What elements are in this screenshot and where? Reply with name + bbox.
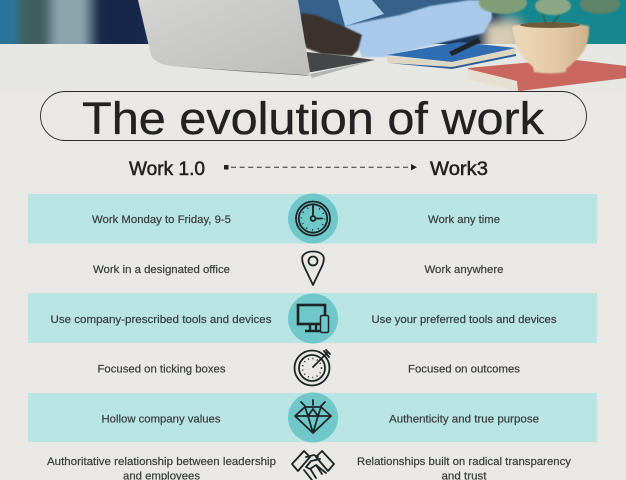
right text: Focused on outcomes xyxy=(408,364,521,376)
heading: Work 1.0: Work 1.0 xyxy=(129,159,205,180)
shirt sleeve xyxy=(344,0,492,57)
icon: handshake xyxy=(292,451,334,480)
right text: Work anywhere xyxy=(424,264,504,276)
icon: monitor and phone xyxy=(288,294,338,344)
left text: Focused on ticking boxes xyxy=(98,364,226,376)
title pill xyxy=(40,92,586,144)
icon: map pin xyxy=(302,252,324,285)
row 1: schedule xyxy=(28,194,597,244)
left text: Work Monday to Friday, 9-5 xyxy=(92,214,231,226)
desk surface xyxy=(0,44,626,92)
person's torso xyxy=(296,0,470,30)
row 6: relationships xyxy=(47,451,572,480)
heading: Work3: Work3 xyxy=(430,159,488,180)
right text: Use your preferred tools and devices xyxy=(372,314,557,326)
left text xyxy=(47,456,276,480)
laptop lid xyxy=(138,0,310,75)
left text: Authoritative relationship between leadership xyxy=(47,456,276,468)
row 2: location xyxy=(93,252,504,285)
left text: Use company-prescribed tools and devices xyxy=(50,314,272,326)
icon: diamond xyxy=(288,392,338,442)
row 5: values xyxy=(28,392,597,442)
right text xyxy=(357,456,572,480)
red notebook xyxy=(468,59,626,91)
plant leaves xyxy=(479,0,620,24)
header photo: desk with laptop, notebooks and plant xyxy=(0,0,626,92)
title text: The evolution of work xyxy=(82,93,545,144)
hand xyxy=(301,13,362,56)
right text: Relationships built on radical transparency xyxy=(357,456,572,468)
laptop keyboard base xyxy=(306,52,375,72)
shirt front xyxy=(338,0,384,26)
left text: Hollow company values xyxy=(102,414,221,426)
row 3: tools xyxy=(28,293,597,344)
row 4: focus xyxy=(98,350,521,386)
left text: Work in a designated office xyxy=(93,264,230,276)
blurred office background xyxy=(0,0,626,44)
dashed arrow xyxy=(224,164,417,170)
icon: clock xyxy=(288,194,338,244)
right text: Work any time xyxy=(428,214,500,226)
blue notebook xyxy=(387,38,516,69)
right text: Authenticity and true purpose xyxy=(389,414,539,426)
icon: target xyxy=(294,350,330,386)
wooden pot xyxy=(512,22,589,74)
